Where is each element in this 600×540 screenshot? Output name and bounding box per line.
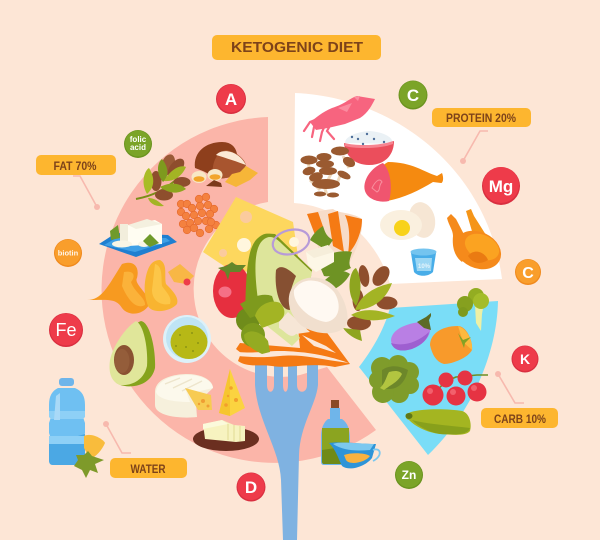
food: roast chicken — [447, 209, 507, 276]
vitamin badge: D: D — [245, 478, 257, 497]
food: ham — [364, 162, 443, 202]
central food: greens — [310, 226, 352, 290]
panel: carb sector — [359, 301, 498, 455]
vitamin badge: C orange: C — [522, 265, 534, 282]
vitamin badge: Mg: Mg — [489, 177, 513, 196]
vitamin badge: folic acid: folic — [130, 135, 147, 144]
food: chicken wings — [87, 260, 177, 314]
fork — [255, 350, 318, 540]
food: gravy boat — [329, 442, 380, 468]
food: avocado half — [109, 321, 155, 386]
food: squid — [304, 96, 375, 141]
food: yellow cheese triangle — [219, 369, 245, 416]
vitamin badge: Fe — [49, 313, 83, 347]
vitamin badge: A: A — [225, 90, 237, 109]
food: coconut and nuts — [192, 142, 258, 187]
vitamin badge: C green — [398, 80, 428, 110]
label: fat 70%: FAT 70% — [54, 159, 97, 173]
food: small roe and cheese bits — [168, 264, 194, 286]
food: tofu on blue plate — [99, 219, 177, 257]
title — [212, 35, 381, 60]
food: yogurt cup — [410, 248, 436, 276]
food: lettuce — [369, 355, 419, 403]
vitamin badge: Mg — [482, 167, 520, 205]
food: brie cheese wheel — [155, 374, 213, 418]
central food: almonds and leaves — [343, 263, 398, 341]
vitamin badge: K: K — [520, 351, 530, 367]
vitamin badge: D — [236, 472, 266, 502]
vitamin badge: folic acid — [124, 130, 152, 158]
central food: cheese slice — [203, 197, 300, 272]
label: fat 70% — [36, 155, 116, 210]
central food: tomato — [213, 262, 251, 318]
panel: protein sector — [294, 93, 502, 284]
label: protein 20%: PROTEIN 20% — [446, 111, 516, 125]
vitamin badge: Zn — [395, 461, 423, 489]
label: water: WATER — [130, 462, 166, 476]
food: pesto bowl — [163, 315, 211, 363]
food: eggplant — [391, 313, 431, 351]
food: water bottle — [49, 378, 85, 465]
vitamin badge: K — [512, 346, 538, 372]
panel: fat sector — [102, 117, 376, 463]
food: brown mushrooms — [300, 146, 357, 198]
central food: avocado — [245, 234, 312, 320]
food: almond branch — [136, 153, 190, 206]
vitamin badge: Fe: Fe — [55, 320, 77, 340]
title: KETOGENIC DIET — [231, 40, 363, 56]
central food: bacon bottom — [236, 328, 350, 367]
food: eggs — [380, 200, 438, 240]
food: tomatoes on vine — [422, 370, 488, 406]
label: carb 10%: CARB 10% — [494, 412, 546, 426]
vitamin badge: folic acid: acid — [130, 143, 146, 152]
food: zucchini — [406, 409, 471, 435]
food: butter on dark plate — [193, 420, 259, 451]
vitamin badge: biotin: biotin — [58, 248, 79, 258]
central food: mushroom — [279, 277, 348, 336]
label: carb 10% — [481, 371, 558, 428]
vitamin badge: Zn: Zn — [402, 468, 416, 482]
food: lemon and herbs — [74, 435, 105, 478]
vitamin badge: C green: C — [407, 86, 419, 105]
vitamin badge: biotin — [54, 239, 82, 267]
vitamin badge: A — [216, 84, 246, 114]
food: orange pepper — [430, 326, 472, 364]
food: cottage cheese bowl — [344, 131, 394, 165]
central food: tofu cube — [306, 245, 334, 272]
food: broccoli — [457, 288, 489, 331]
vitamin badge: C orange — [515, 259, 541, 285]
central food: bacon top — [307, 209, 362, 262]
label: water — [103, 421, 187, 478]
food: olive oil bottle — [321, 400, 350, 465]
food: cheese wedge slice — [185, 388, 212, 410]
food: yogurt cup: 10% — [418, 264, 431, 270]
central food: broccoli — [236, 295, 300, 354]
food: salmon roe — [177, 193, 220, 237]
label: protein 20% — [432, 108, 531, 164]
central food: onion ring — [270, 226, 312, 258]
